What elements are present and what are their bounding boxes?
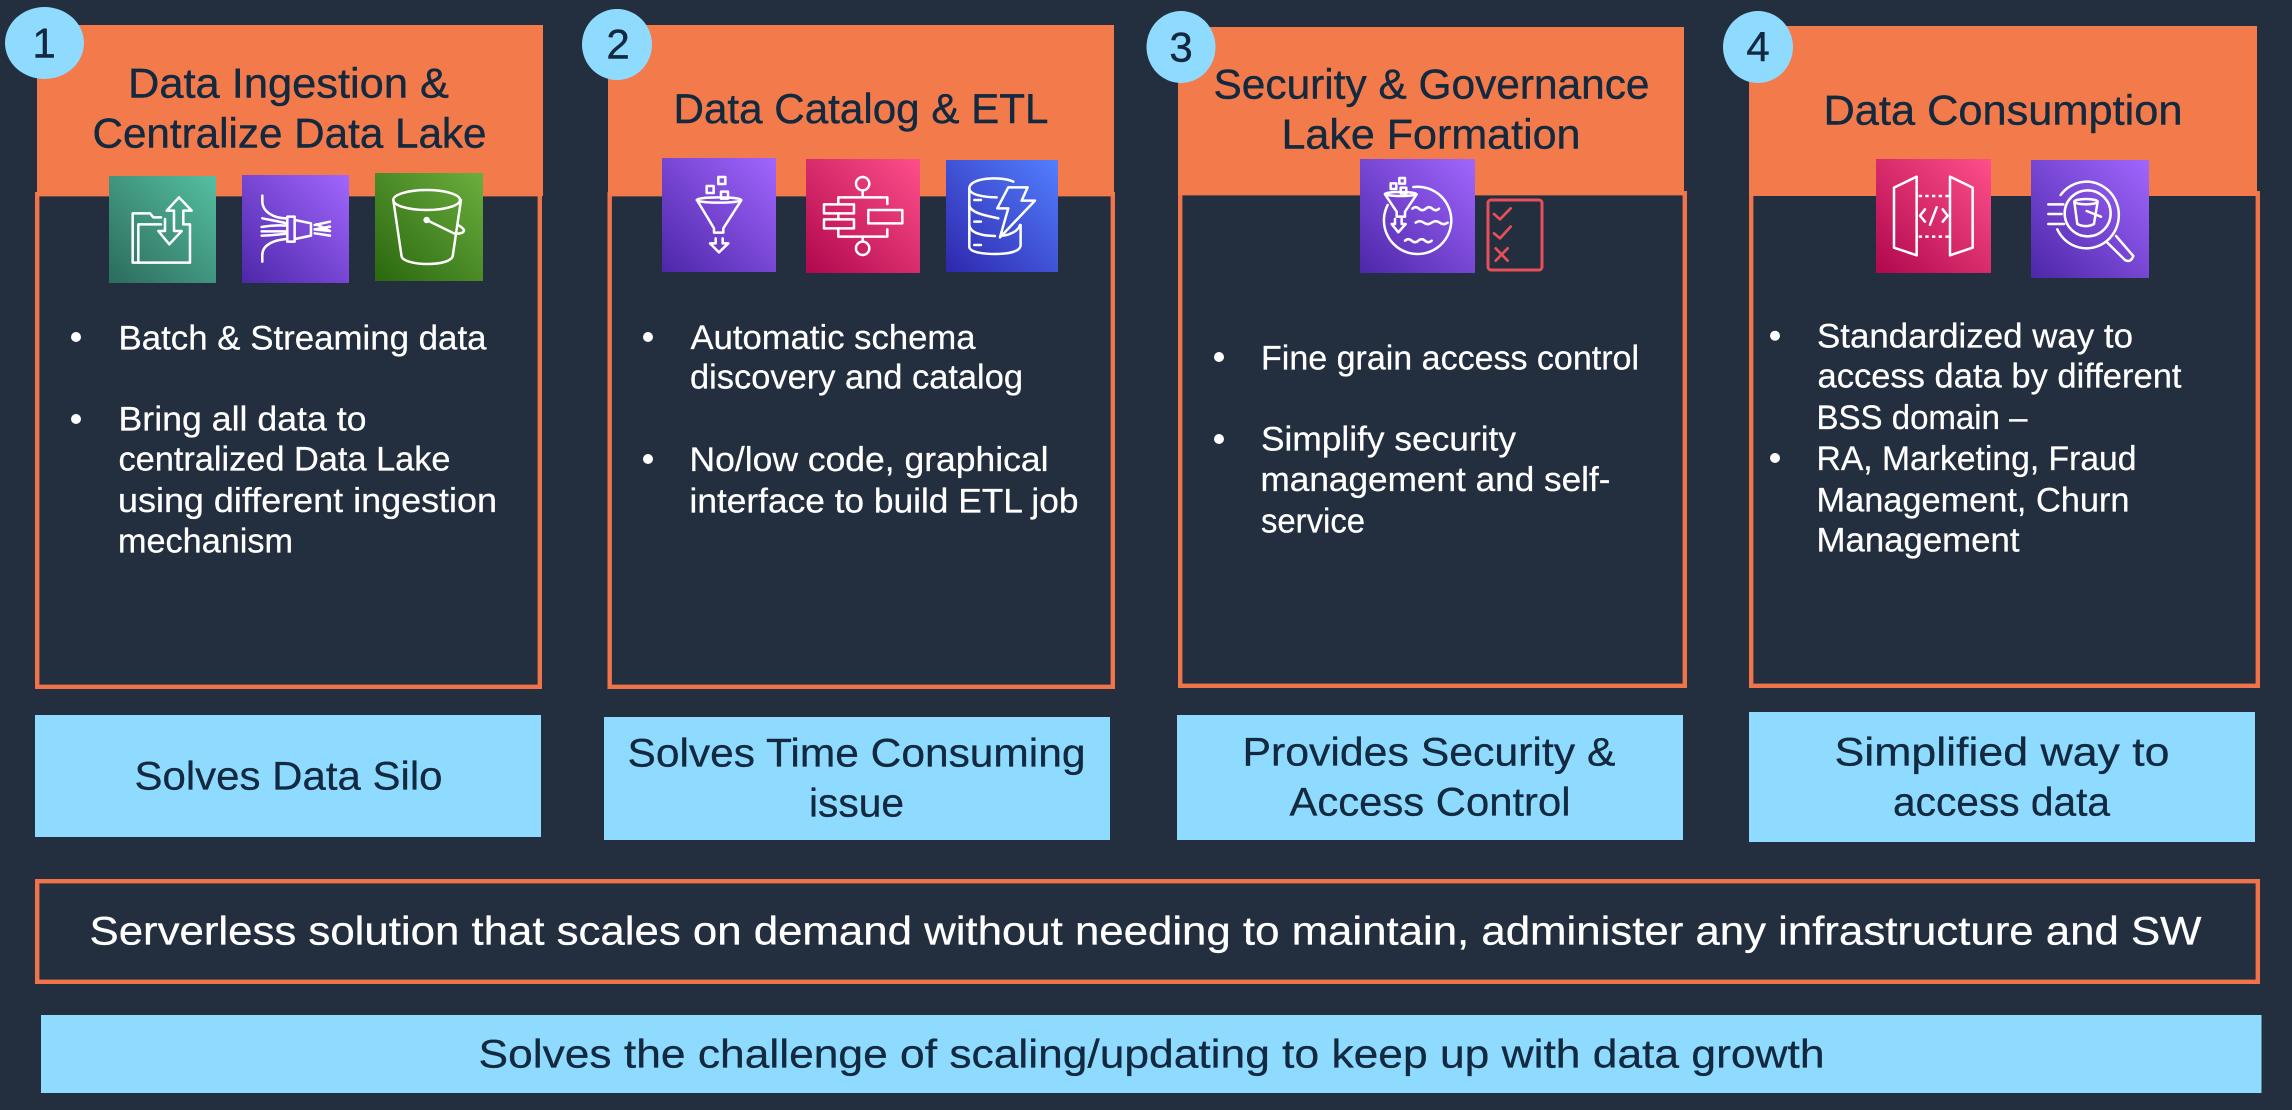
outcome label: Solves Data Silo <box>134 754 442 798</box>
bullet list: BSS domain – <box>1816 399 2028 437</box>
heading banner <box>1749 26 2257 196</box>
step number 3: 3 <box>1169 23 1193 70</box>
step number 1: 1 <box>32 19 56 66</box>
bullet list <box>1214 339 1639 540</box>
heading banner: Data Catalog & ETL <box>674 85 1048 132</box>
outcome label: Solves Time Consuming <box>628 732 1086 776</box>
bullet list: Simplify security <box>1261 421 1517 459</box>
bullet list: RA, Marketing, Fraud <box>1816 440 2136 478</box>
panel: security and governance <box>1146 11 1685 840</box>
heading banner: Data Consumption <box>1824 86 2182 133</box>
outcome label: issue <box>809 782 904 826</box>
bullet list: access data by different <box>1818 358 2182 396</box>
step number 2: 2 <box>606 21 630 68</box>
heading banner <box>1178 27 1684 195</box>
panel: data ingestion and centralized data lake <box>5 7 543 837</box>
bullet list: interface to build ETL job <box>690 482 1078 520</box>
outcome label <box>1749 712 2255 842</box>
panel outline <box>1180 193 1685 686</box>
step number 4 <box>1723 11 1793 83</box>
bullet list: Bring all data to <box>118 401 366 439</box>
icon: kinesis firehose <box>242 175 349 283</box>
step number 3 <box>1146 11 1216 83</box>
bullet list: service <box>1261 502 1365 540</box>
heading banner <box>608 25 1114 196</box>
outcome label: Simplified way to <box>1834 731 2170 775</box>
outcome label: Access Control <box>1290 781 1570 825</box>
icon: s3 bucket <box>375 173 483 281</box>
bullet list <box>71 319 497 561</box>
icon: athena <box>2031 160 2149 278</box>
panel outline <box>37 194 540 687</box>
bullet list: using different ingestion <box>118 482 497 520</box>
heading banner: Security & Governance <box>1214 61 1650 108</box>
bullet list: Fine grain access control <box>1261 339 1639 377</box>
outcome label <box>35 715 541 837</box>
callout: serverless solution: Serverless solution that scales on demand without needing to maintain, administer any infrastructure and SW <box>90 910 2202 954</box>
step number 2 <box>582 9 652 80</box>
outcome label <box>1177 715 1683 840</box>
callout: scaling challenge <box>41 1015 2262 1093</box>
panel outline <box>610 194 1113 687</box>
panel: data consumption <box>1723 11 2258 842</box>
bullet list: centralized Data Lake <box>118 441 450 479</box>
heading banner: Lake Formation <box>1282 110 1580 157</box>
heading banner: Centralize Data Lake <box>92 109 487 156</box>
bullet list: Standardized way to <box>1817 318 2133 356</box>
bullet list: No/low code, graphical <box>690 441 1048 479</box>
bullet list <box>643 319 1078 520</box>
bullet list <box>1770 318 2182 560</box>
bullet list: Management, Churn <box>1816 482 2130 520</box>
callout: scaling challenge: Solves the challenge of scaling/updating to keep up with data growth <box>478 1033 1824 1077</box>
outcome label: Provides Security & <box>1242 731 1616 775</box>
outcome label <box>604 717 1110 840</box>
outcome label: access data <box>1893 781 2111 825</box>
heading banner: Data Ingestion & <box>128 59 449 106</box>
bullet list: management and self- <box>1260 461 1610 499</box>
icon: data transfer <box>109 176 216 283</box>
panel: data catalog and ETL <box>582 9 1114 840</box>
bullet list: mechanism <box>118 523 293 561</box>
step number 1 <box>5 7 84 79</box>
icon: lake formation <box>1360 159 1475 273</box>
bullet list: Management <box>1816 522 2020 560</box>
icon: glue <box>662 158 776 272</box>
bullet list: Batch & Streaming data <box>118 319 487 357</box>
icon: step functions <box>806 159 920 273</box>
icon: access checklist <box>1488 200 1542 270</box>
bullet list: Automatic schema <box>690 319 976 357</box>
icon: dynamodb <box>946 160 1058 272</box>
icon: api gateway <box>1876 159 1991 273</box>
panel outline <box>1751 193 2258 686</box>
bullet list: discovery and catalog <box>690 358 1023 396</box>
heading banner <box>37 25 543 196</box>
step number 4: 4 <box>1746 23 1770 70</box>
callout: serverless solution <box>37 881 2258 982</box>
